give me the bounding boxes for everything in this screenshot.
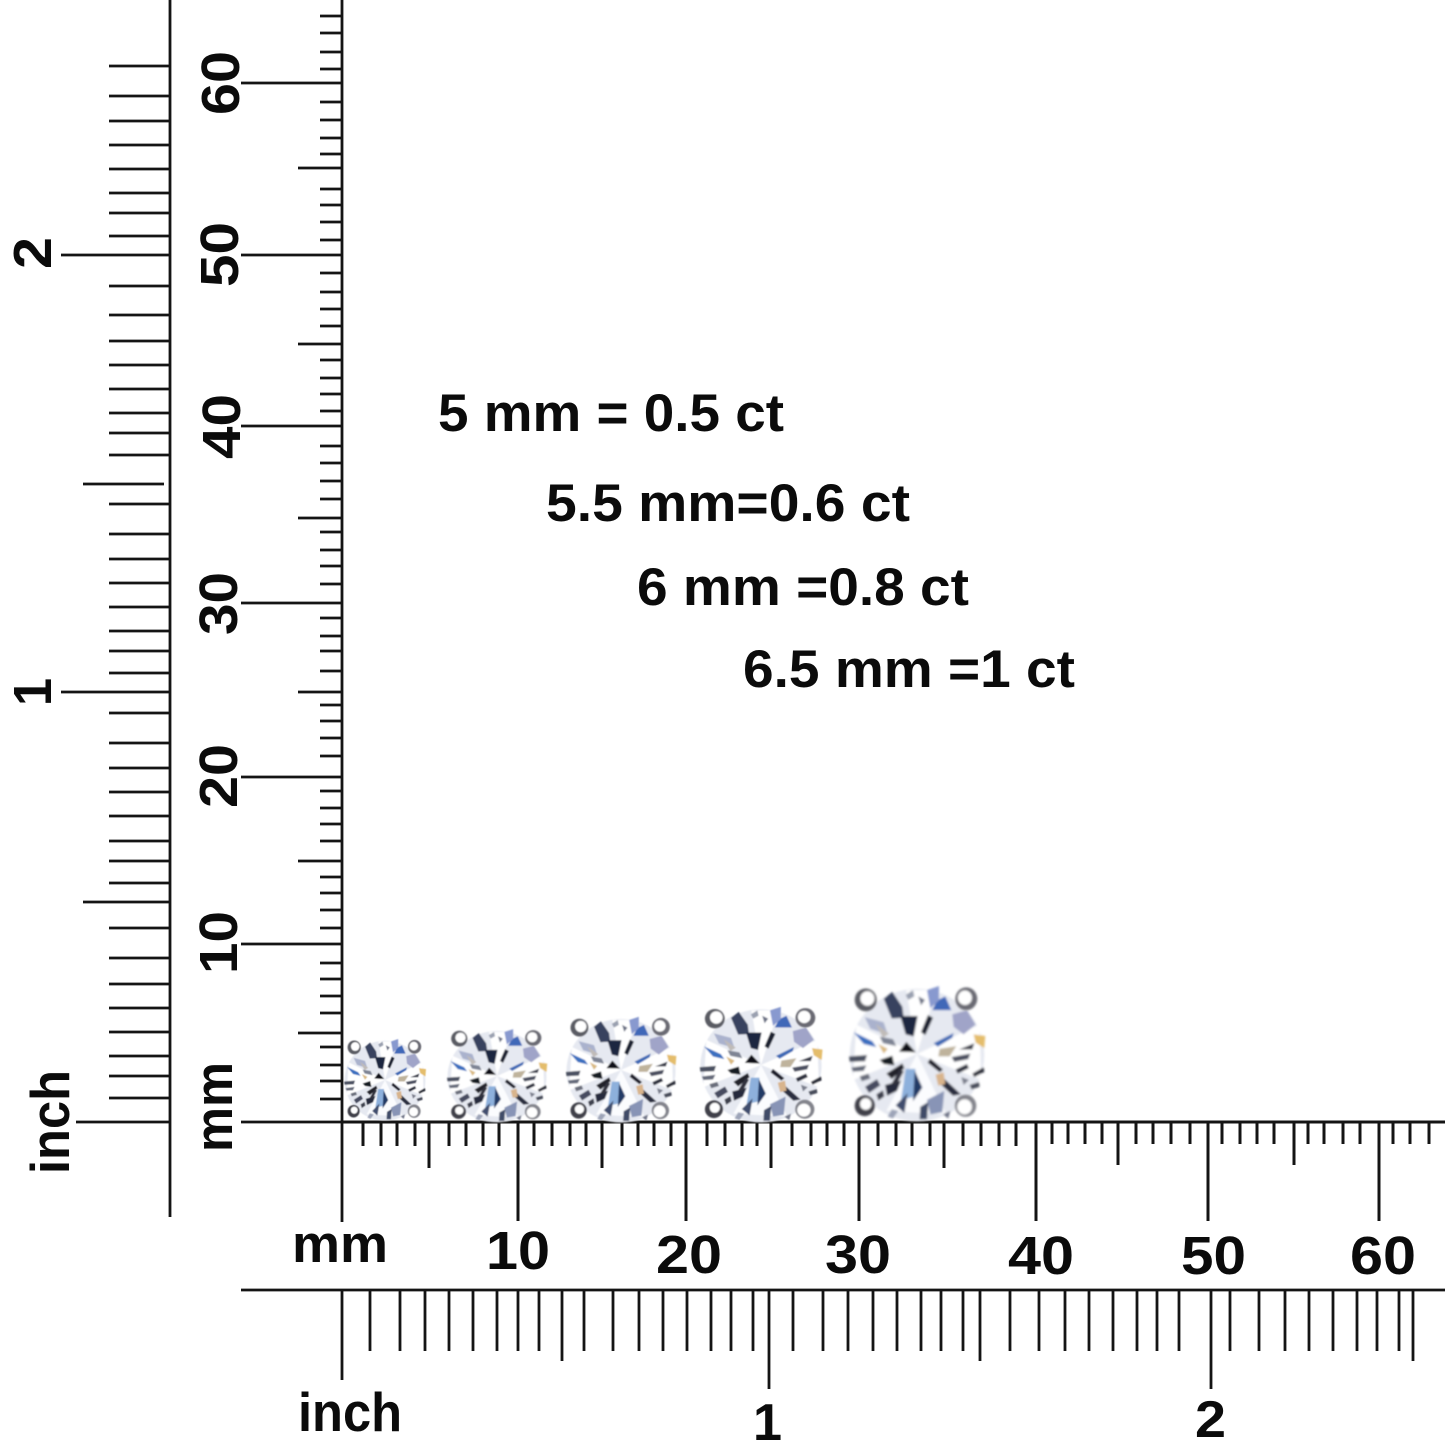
diamond: 6.5 mm [700,1007,822,1123]
inch label 1: 1 [3,678,63,706]
bottom inch ruler [241,1290,1445,1445]
diamond: 5.5 mm [447,1029,547,1122]
left inch ruler axis and ticks [61,0,170,1217]
mm unit label: mm [292,1215,388,1274]
mm label 10: 10 [189,911,249,974]
conversion: 6 mm: 6 mm =0.8 ct [637,558,969,617]
mm label 20: 20 [189,744,249,808]
conversion: 6.5 mm: 6.5 mm =1 ct [743,640,1075,699]
mm label 60: 60 [1350,1226,1416,1286]
diamond: 6 mm [566,1017,676,1123]
mm label 20: 20 [656,1225,722,1285]
inch unit label: inch [19,1070,81,1174]
bottom inch ruler axis and ticks [241,1290,1445,1389]
left inch ruler [3,0,170,1217]
mm label 40: 40 [1008,1226,1074,1286]
bottom millimetre ruler axis and ticks [342,1122,1445,1221]
carat conversion text [438,384,1075,699]
mm label 50: 50 [190,222,250,287]
mm label 30: 30 [189,572,249,635]
bottom millimetre ruler [292,1122,1445,1286]
left millimetre ruler [185,0,342,1222]
diamond: 5 mm [344,1039,426,1121]
conversion: 5 mm: 5 mm = 0.5 ct [438,384,784,443]
diamond: 7 mm [849,986,985,1121]
diamond row [344,986,985,1123]
mm label 50: 50 [1181,1226,1246,1286]
conversion: 5.5 mm: 5.5 mm=0.6 ct [546,474,910,533]
mm label 10: 10 [486,1221,550,1281]
mm unit label: mm [185,1062,244,1152]
mm label 60: 60 [191,51,251,115]
inch unit label: inch [298,1381,402,1443]
inch label 2: 2 [3,237,63,269]
mm label 30: 30 [825,1225,891,1285]
mm label 40: 40 [192,394,252,459]
left millimetre ruler axis and ticks [241,0,342,1222]
